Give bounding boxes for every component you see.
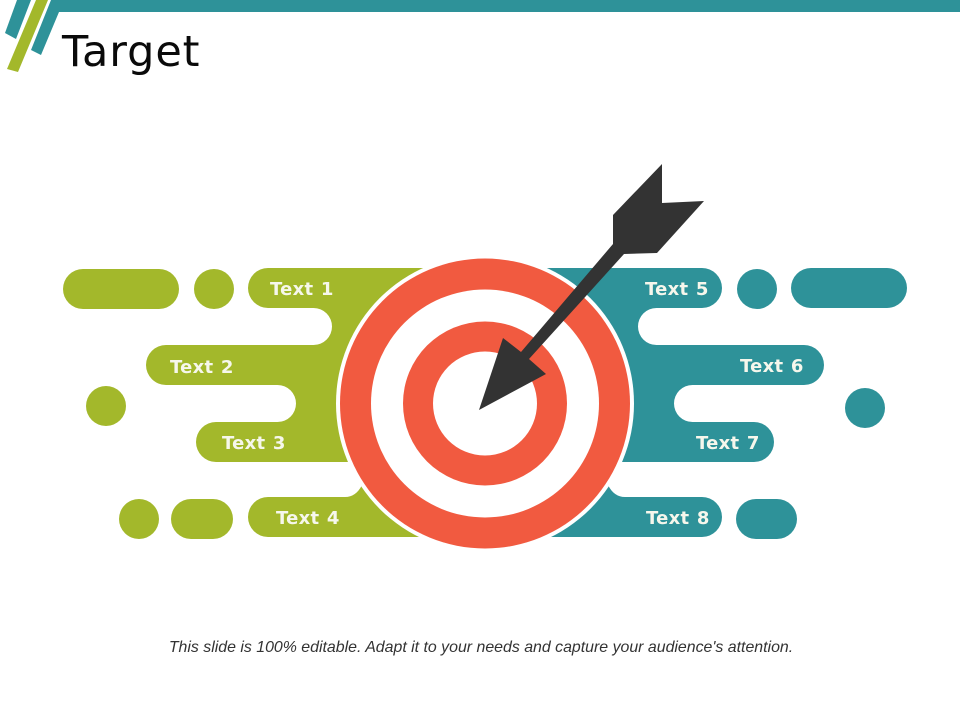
label: Text 8: Text 8 — [646, 508, 710, 529]
footer caption: This slide is 100% editable. Adapt it to your needs and capture your audience's attention. — [169, 639, 793, 656]
panel: teal right ribbons — [485, 268, 824, 537]
label: Text 2: Text 2 — [170, 357, 234, 378]
label: Text 6: Text 6 — [740, 356, 804, 377]
teal decorative pills and dots — [736, 268, 907, 539]
green decorative pills and dots — [63, 269, 234, 539]
label: Text 7: Text 7 — [696, 433, 760, 454]
label: Text 5: Text 5 — [645, 279, 709, 300]
panel: green left ribbons — [146, 268, 485, 537]
target bullseye — [336, 254, 634, 552]
label: Text 3: Text 3 — [222, 433, 286, 454]
header decoration — [5, 0, 960, 72]
title: Target — [61, 27, 200, 77]
arrow — [479, 164, 704, 410]
label: Text 4: Text 4 — [276, 508, 340, 529]
label: Text 1: Text 1 — [270, 279, 334, 300]
